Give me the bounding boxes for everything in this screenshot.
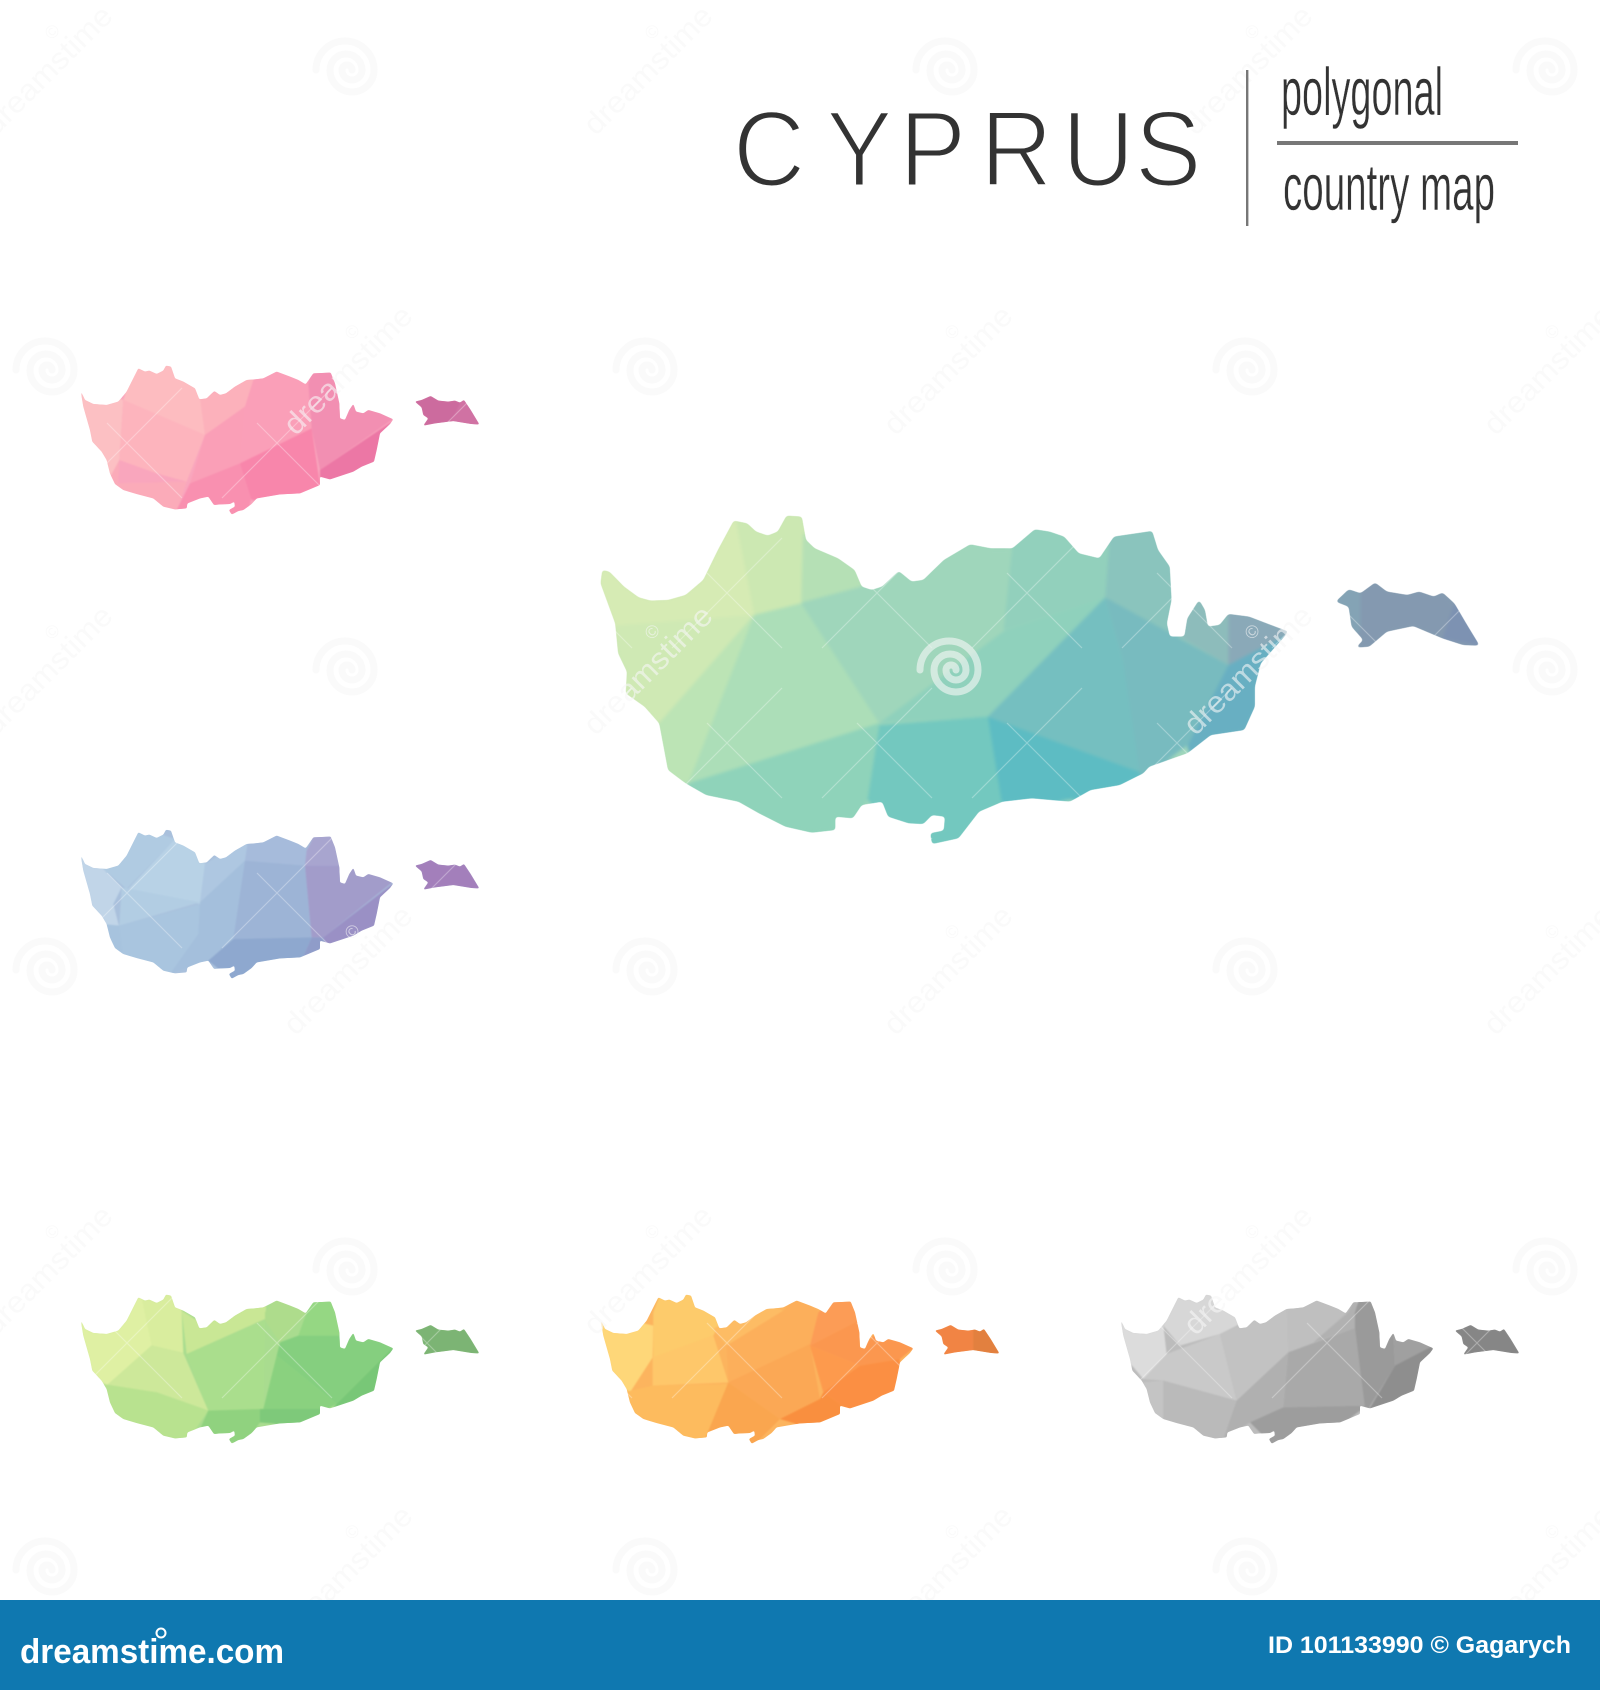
divider: horizontal rule [1277,141,1518,145]
map: orange Cyprus [601,1294,999,1444]
watermark: dreamstime text: © [340,920,364,944]
watermark: dreamstime text: © [340,1520,364,1544]
divider: vertical rule [1246,70,1248,226]
watermark: dreamstime text: © [40,1220,64,1244]
watermark: dreamstime text: © [40,20,64,44]
watermark: dreamstime text: © [340,320,364,344]
footer credit: ID 101133990 © Gagarych [1268,1632,1571,1659]
watermark: dreamstime text: dreamstime [277,899,419,1041]
watermark: dreamstime text: © [1240,20,1264,44]
watermark: dreamstime text: © [940,1520,964,1544]
title: CYPRUS: CYPRUS [733,90,1202,210]
watermark: dreamstime text: © [940,920,964,944]
watermark: dreamstime text: dreamstime [577,599,719,741]
watermark: dreamstime text: dreamstime [277,1499,419,1641]
footer logo: dreamstime.com: dreamstime.com [20,1633,284,1671]
watermark: dreamstime text: © [640,20,664,44]
watermark: dreamstime text: © [1240,620,1264,644]
watermark: dreamstime text: © [640,1220,664,1244]
watermark: dreamstime text: dreamstime [577,1199,719,1341]
watermark: dreamstime text: dreamstime [577,0,719,141]
watermark: dreamstime text: dreamstime [877,899,1019,1041]
watermark: dreamstime text: dreamstime [877,299,1019,441]
watermark: dreamstime text: © [1540,1520,1564,1544]
watermark: dreamstime text: dreamstime [277,299,419,441]
watermark: dreamstime text: © [640,620,664,644]
map: green Cyprus [81,1294,479,1444]
watermark: dreamstime text: dreamstime [1177,0,1319,141]
watermark: dreamstime text: © [1240,1220,1264,1244]
map: large teal-green Cyprus [600,516,1478,844]
footer bar [0,1600,1600,1690]
watermark: dreamstime text: © [940,320,964,344]
watermark: dreamstime text: dreamstime [877,1499,1019,1641]
watermark: dreamstime text: dreamstime [1177,599,1319,741]
watermark: dreamstime text: © [1540,920,1564,944]
map: pink Cyprus [81,366,479,514]
watermark: dreamstime text: © [1540,320,1564,344]
map: gray Cyprus [1121,1294,1519,1444]
map: purple-blue Cyprus [81,830,479,978]
watermark: dreamstime text: © [40,620,64,644]
watermark: dreamstime text: dreamstime [1177,1199,1319,1341]
subtitle: polygonal: polygonal [1281,54,1443,130]
